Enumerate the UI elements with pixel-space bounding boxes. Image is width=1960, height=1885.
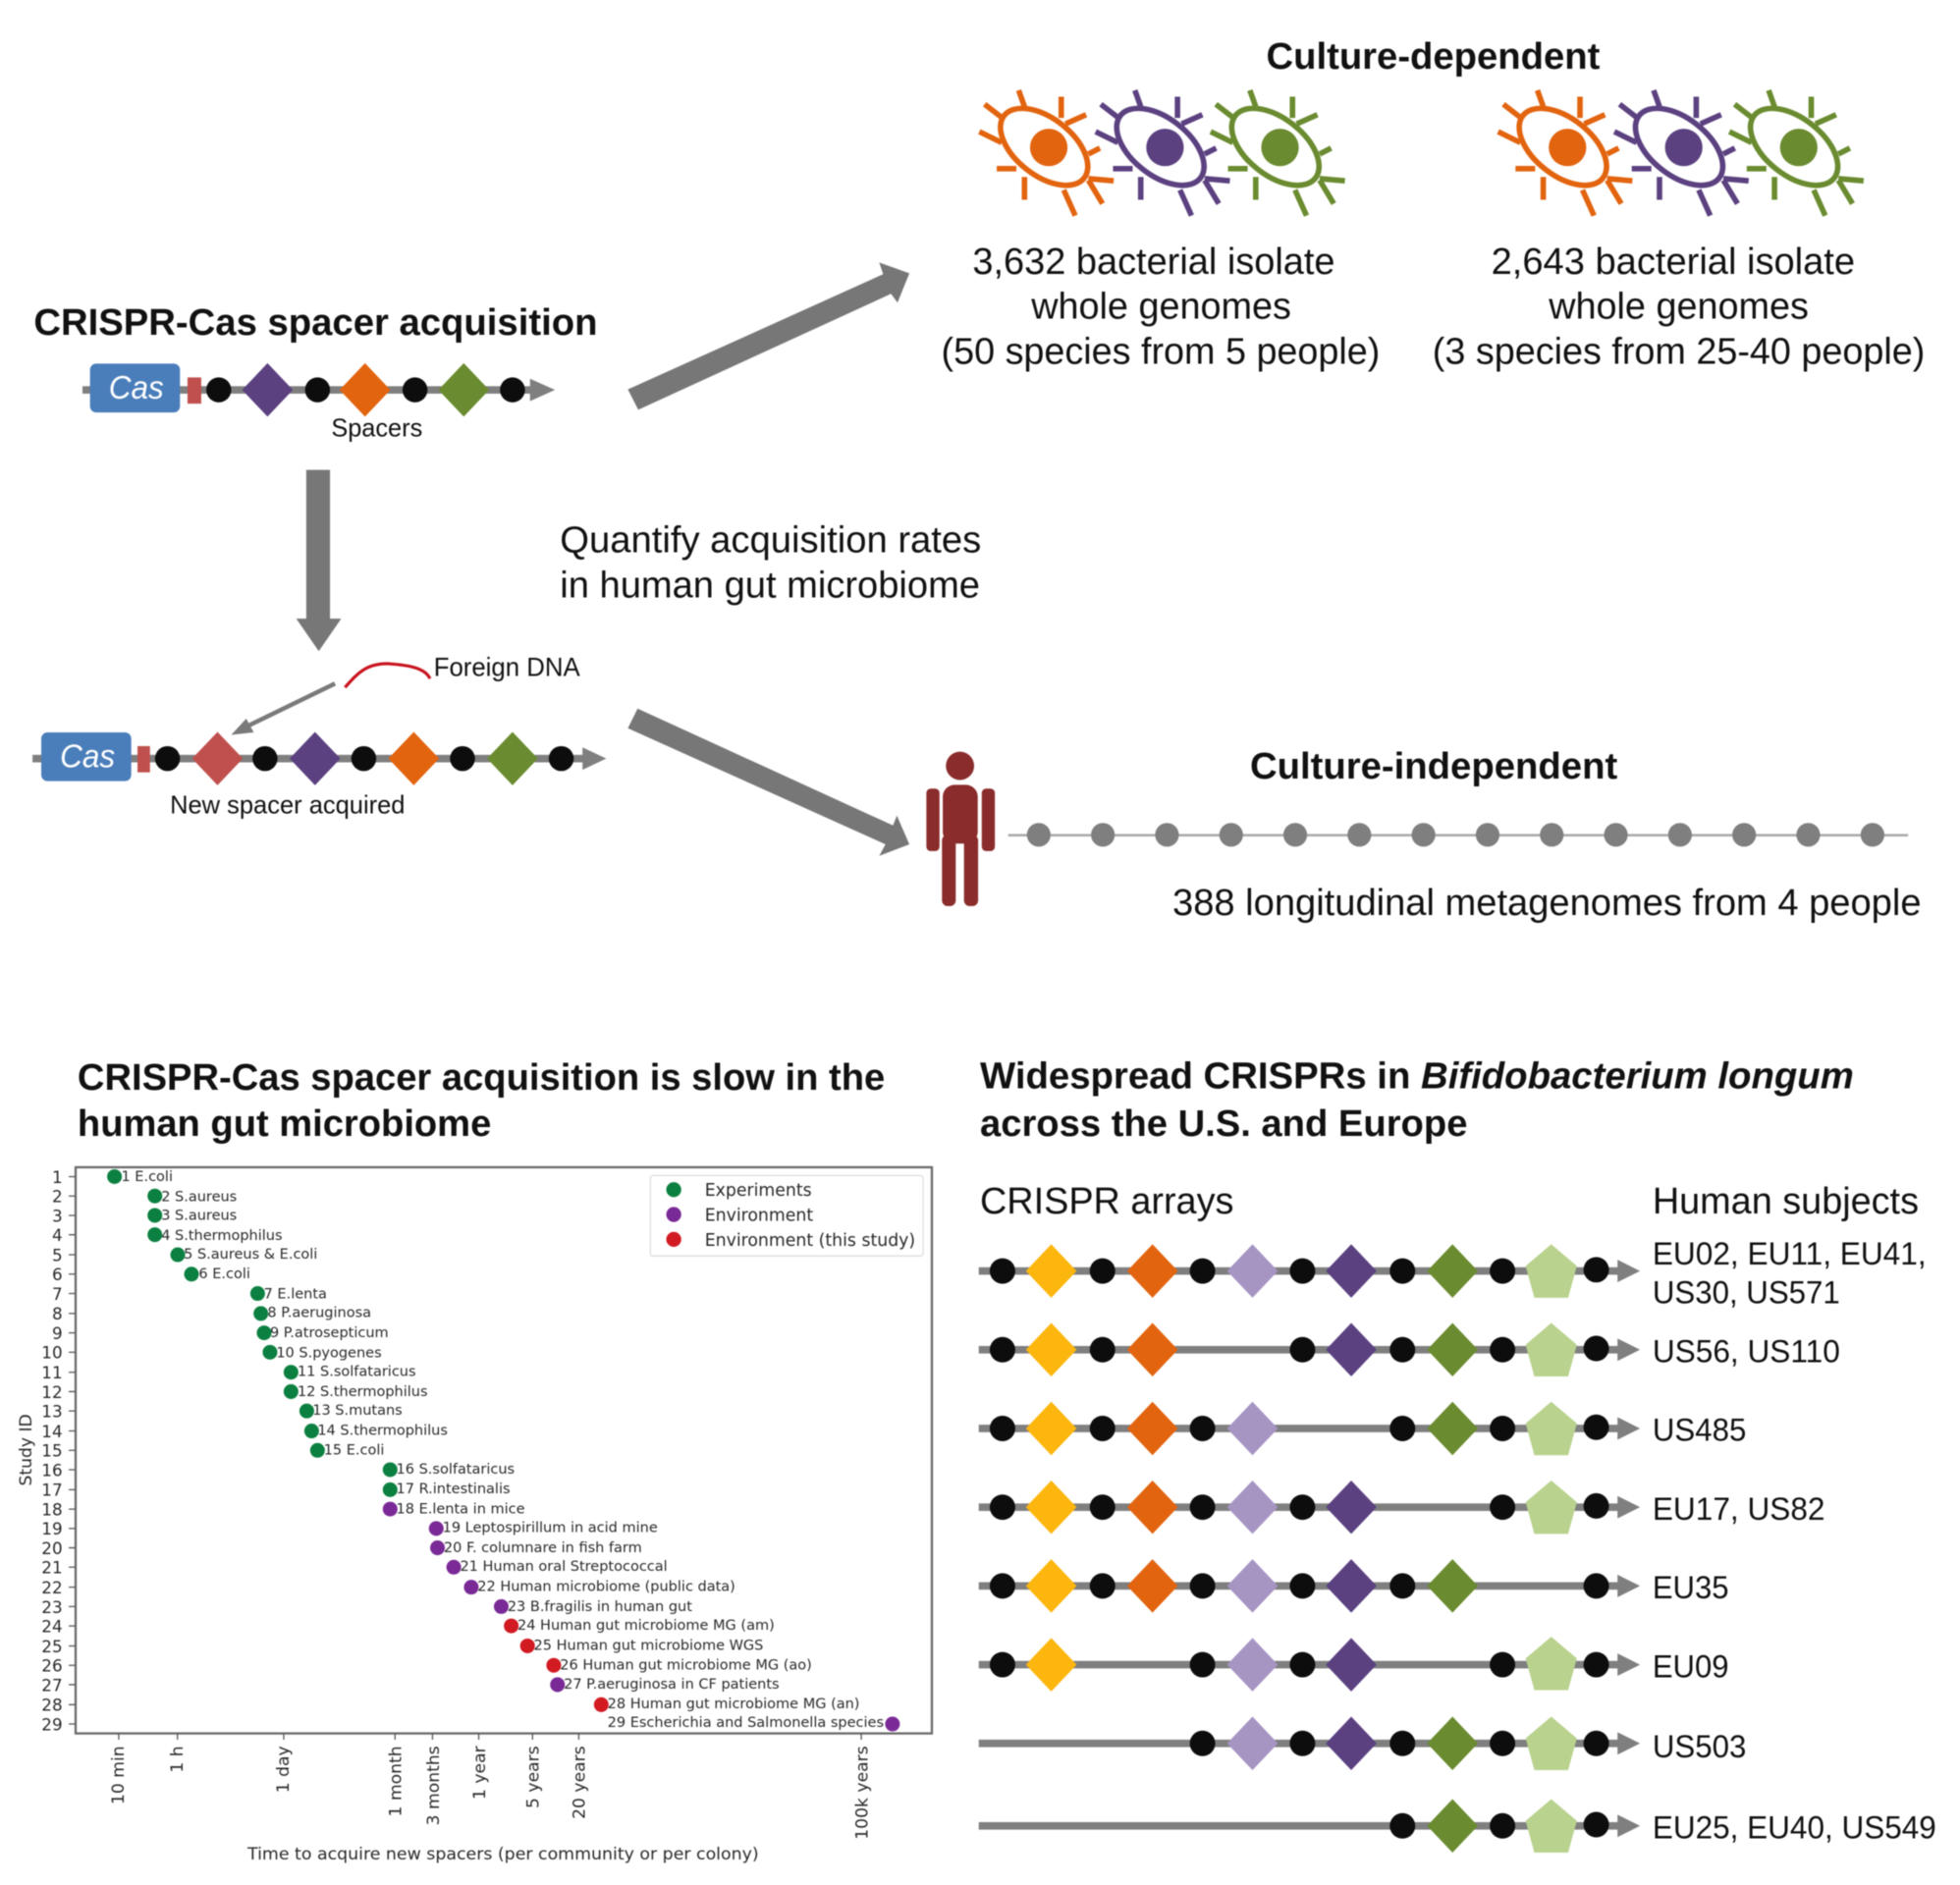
data labels: 12 S.thermophilus [298, 1384, 428, 1400]
heading: widespread CRISPRs [980, 1055, 1854, 1145]
axis: time ticks: 1 h [168, 1746, 188, 1773]
axis: study ID ticks: 17 [41, 1481, 63, 1500]
data labels: 11 S.solfataricus [298, 1365, 416, 1380]
axis: study ID ticks: 26 [41, 1656, 63, 1676]
axis: study ID ticks: 13 [41, 1402, 63, 1422]
heading: CRISPR-Cas spacer acquisition: CRISPR-Cas spacer acquisition [33, 301, 597, 344]
heading: culture-dependent: Culture-dependent [1267, 35, 1601, 78]
array row 4 [979, 1481, 1640, 1534]
axis: study ID ticks: 23 [41, 1597, 63, 1617]
axis: time ticks: 5 years [524, 1746, 544, 1808]
legend: Environment (this study) [705, 1231, 915, 1251]
array row 5 [979, 1559, 1640, 1613]
panel: CRISPR arrays across subjects [979, 1180, 1936, 1853]
icon: second bacteria group [1498, 90, 1864, 216]
arrow: to culture-dependent [627, 262, 909, 409]
text: first isolate collection: (50 species from 5 people) [942, 330, 1380, 372]
array row 6 [979, 1637, 1640, 1692]
axis: study ID ticks: 10 [41, 1343, 63, 1363]
axis: study ID ticks: 29 [41, 1714, 63, 1734]
arrow: to culture-independent [627, 709, 909, 856]
axis: time ticks: 10 min [109, 1746, 129, 1804]
legend [650, 1175, 923, 1256]
axis: study ID ticks: 28 [41, 1696, 63, 1715]
timeline: longitudinal samples [1008, 823, 1908, 846]
axis: time ticks: 100k years [852, 1746, 872, 1840]
heading: widespread CRISPRs: Widespread CRISPRs in Bifidobacterium longum [980, 1055, 1854, 1098]
heading: spacer acquisition is slow: CRISPR-Cas spacer acquisition is slow in the [78, 1056, 885, 1099]
subjects row 1 [1653, 1236, 1927, 1311]
icon: Cas box [41, 732, 132, 781]
array row 1 [979, 1244, 1640, 1298]
data labels: 7 E.lenta [264, 1287, 327, 1303]
data labels: 29 Escherichia and Salmonella species [608, 1715, 884, 1731]
axis: study ID ticks: 21 [41, 1558, 63, 1578]
axis: study ID ticks: 6 [52, 1265, 63, 1284]
axis: study ID ticks: 16 [41, 1460, 63, 1480]
data labels: 14 S.thermophilus [317, 1423, 448, 1438]
axis: study ID ticks: 19 [41, 1519, 63, 1538]
chart: time to acquire new spacers [17, 1167, 932, 1864]
axis: study ID ticks: 24 [41, 1616, 63, 1636]
axis: study ID ticks: 22 [41, 1578, 63, 1597]
data labels: 20 F. columnare in fish farm [444, 1540, 642, 1556]
data labels: 28 Human gut microbiome MG (an) [608, 1696, 859, 1712]
axis: study ID ticks: 25 [41, 1637, 63, 1656]
subjects row 6: EU09 [1653, 1648, 1729, 1684]
label: new spacer acquired: New spacer acquired [170, 792, 405, 820]
heading: spacer acquisition is slow: human gut microbiome [78, 1103, 491, 1145]
axis: study ID ticks: 14 [41, 1422, 63, 1441]
text: second isolate collection: (3 species from 25-40 people) [1433, 330, 1925, 372]
data labels: 8 P.aeruginosa [267, 1306, 371, 1321]
icon: human figure [926, 752, 995, 906]
heading: culture-independent: Culture-independent [1250, 745, 1617, 787]
axis: time ticks: 1 day [274, 1746, 294, 1793]
data labels: 21 Human oral Streptococcal [460, 1559, 668, 1575]
text: second isolate collection: whole genomes [1548, 286, 1809, 328]
array row 3 [979, 1402, 1640, 1455]
subjects row 4: EU17, US82 [1653, 1491, 1825, 1527]
data labels: 10 S.pyogenes [276, 1345, 382, 1361]
axis: study ID ticks: 18 [41, 1499, 63, 1519]
axis: study ID ticks [41, 1167, 63, 1734]
data labels: 4 S.thermophilus [161, 1228, 283, 1244]
data labels: 3 S.aureus [161, 1208, 237, 1223]
axis: time ticks: 1 year [470, 1745, 490, 1800]
axis: study ID ticks: 15 [41, 1441, 63, 1461]
text: first isolate collection [942, 241, 1380, 372]
legend: Environment [705, 1207, 813, 1226]
data labels: 15 E.coli [324, 1443, 384, 1459]
array row 7 [979, 1717, 1640, 1770]
axis: study ID ticks: 27 [41, 1675, 63, 1695]
subjects row 2: US56, US110 [1653, 1334, 1840, 1370]
legend: Experiments [705, 1181, 812, 1201]
array row 8 [979, 1800, 1640, 1853]
subjects row 1: EU02, EU11, EU41, [1653, 1236, 1927, 1271]
panel: culture-dependent [942, 35, 1925, 372]
axis: time ticks [109, 1745, 872, 1840]
diagram: array with new spacer [32, 731, 606, 785]
axis: study ID tick marks [69, 1176, 861, 1740]
data labels: 18 E.lenta in mice [397, 1502, 525, 1518]
data labels: 1 E.coli [121, 1169, 173, 1185]
text: quantify acquisition rates: Quantify acquisition rates [560, 519, 981, 562]
subjects row 8: EU25, EU40, US549 [1653, 1810, 1936, 1846]
icon: foreign DNA strand [345, 664, 430, 687]
subjects row 7: US503 [1653, 1729, 1746, 1764]
data labels: 25 Human gut microbiome WGS [534, 1638, 763, 1653]
icon: Cas box: Cas [109, 370, 164, 406]
diagram: initial CRISPR array [82, 363, 555, 416]
data labels: 16 S.solfataricus [397, 1462, 515, 1478]
axis: study ID ticks: 9 [52, 1323, 63, 1343]
axis: study ID ticks: 1 [52, 1167, 63, 1187]
icon: Cas box: Cas [60, 739, 115, 776]
axis: time ticks: 20 years [571, 1746, 590, 1819]
axis: study ID ticks: 2 [52, 1187, 63, 1207]
arrow: foreign DNA into array [231, 683, 335, 734]
label: spacers: Spacers [331, 414, 422, 442]
axis: study ID ticks: 20 [41, 1538, 63, 1558]
data labels: 24 Human gut microbiome MG (am) [517, 1618, 775, 1634]
axis: study ID ticks: 11 [41, 1363, 63, 1382]
data labels: 19 Leptospirillum in acid mine [443, 1521, 658, 1536]
heading: widespread CRISPRs: across the U.S. and Europe [980, 1103, 1467, 1145]
axis: study ID ticks: 5 [52, 1245, 63, 1265]
axis: study ID ticks: 8 [52, 1304, 63, 1323]
axis: study ID ticks: 12 [41, 1382, 63, 1402]
column heading: human subjects: Human subjects [1653, 1180, 1919, 1222]
icon: first bacteria group [979, 90, 1345, 216]
axis: time ticks: 1 month [387, 1746, 407, 1816]
column heading: CRISPR arrays: CRISPR arrays [980, 1180, 1233, 1222]
data labels [121, 1169, 884, 1731]
data labels: 27 P.aeruginosa in CF patients [564, 1677, 780, 1693]
axis: study ID ticks: 7 [52, 1284, 63, 1304]
axis: study ID ticks: 3 [52, 1206, 63, 1225]
array row 2 [979, 1323, 1640, 1376]
axis: time ticks: 3 months [424, 1746, 444, 1825]
text: second isolate collection [1433, 241, 1925, 372]
text: second isolate collection: 2,643 bacterial isolate [1492, 241, 1855, 283]
data labels: 23 B.fragilis in human gut [508, 1599, 692, 1615]
text: quantify acquisition rates: in human gut microbiome [560, 564, 980, 606]
panel: culture-independent [926, 745, 1922, 924]
data labels: 9 P.atrosepticum [270, 1325, 389, 1341]
subjects row 5: EU35 [1653, 1570, 1729, 1605]
text: quantify acquisition rates [560, 519, 981, 606]
data labels: 26 Human gut microbiome MG (ao) [560, 1658, 812, 1674]
text: first isolate collection: 3,632 bacterial isolate [972, 241, 1335, 283]
axis title: study ID: Study ID [17, 1414, 36, 1486]
data labels: 22 Human microbiome (public data) [477, 1579, 735, 1594]
data labels: 2 S.aureus [161, 1189, 237, 1205]
icon: Cas box [90, 363, 180, 412]
data labels: 6 E.coli [198, 1266, 250, 1282]
heading: spacer acquisition is slow [78, 1056, 885, 1145]
text: first isolate collection: whole genomes [1030, 286, 1291, 328]
text: metagenomes: 388 longitudinal metagenomes from 4 people [1172, 882, 1922, 924]
axis title: time to acquire: Time to acquire new spacers (per community or per colony) [246, 1845, 759, 1864]
axis: study ID ticks: 4 [52, 1225, 63, 1245]
data points [107, 1169, 899, 1732]
label: foreign DNA: Foreign DNA [434, 653, 580, 682]
data labels: 17 R.intestinalis [397, 1481, 511, 1497]
data labels: 5 S.aureus & E.coli [184, 1247, 317, 1263]
arrow: down to new spacer array [297, 470, 342, 651]
subjects row 3: US485 [1653, 1413, 1746, 1448]
subjects row 1: US30, US571 [1653, 1275, 1840, 1311]
data labels: 13 S.mutans [312, 1403, 403, 1419]
